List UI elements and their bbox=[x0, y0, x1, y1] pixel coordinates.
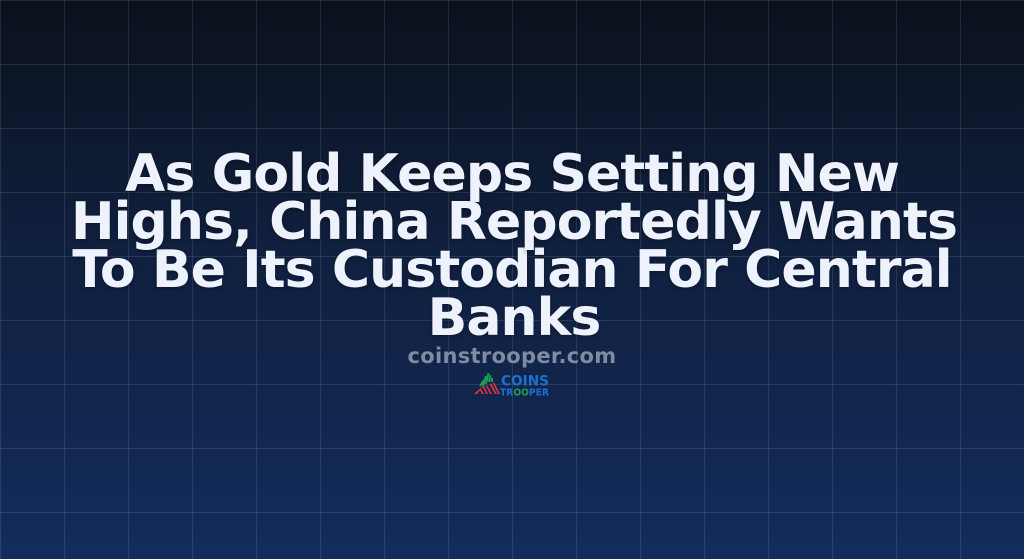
icon: green and red chart peaks bbox=[474, 373, 500, 394]
site name: coinstrooper.com bbox=[408, 344, 616, 368]
title: Banks bbox=[428, 288, 600, 348]
title bbox=[71, 144, 957, 348]
wordmark: COINS: COINS bbox=[501, 374, 549, 390]
title: Highs, China Reportedly Wants bbox=[71, 192, 957, 252]
logo: Coins Trooper bbox=[474, 372, 550, 398]
title: To Be Its Custodian For Central bbox=[72, 240, 952, 300]
title: As Gold Keeps Setting New bbox=[125, 144, 899, 204]
